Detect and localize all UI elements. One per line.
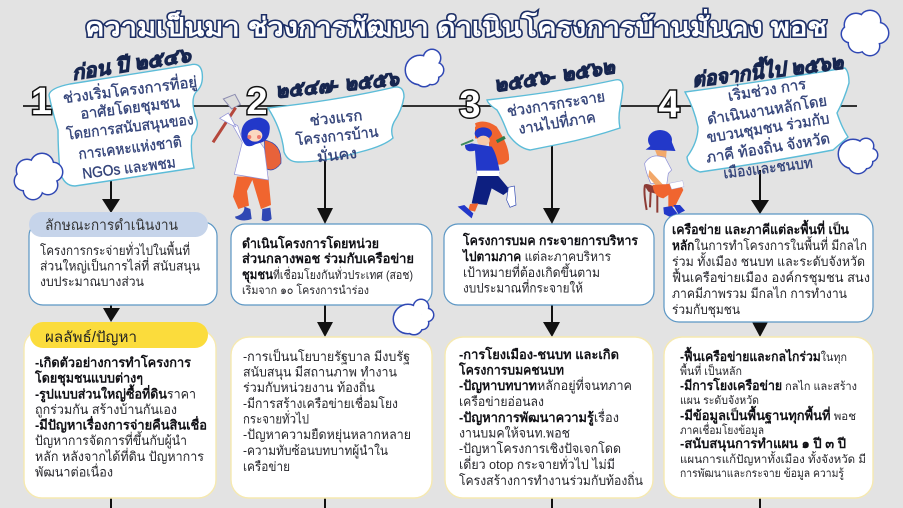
connector lines and arrows [102,144,769,508]
text: period 4 method: หลักในการทำโครงการในพื้นที่ มีกลไก [672,236,867,253]
banner: period 4: เมืองและชนบท [722,155,814,182]
banner: period 2: มั่นคง [316,142,358,166]
text: period 2 results: -ความทับซ้อนบทบาทผู้นำใน [243,443,388,459]
text: period 3 results [458,346,643,488]
text: period 4 results: แผน ระดับจังหวัด [680,395,759,407]
text: period 4 results: -ฟื้นเครือข่ายและกลไกร่วมในทุก [680,346,847,364]
banner: period 2: ช่วงแรก [309,107,363,130]
text: period 1 results: ปัญหาการจัดการที่ขึ้นกับผู้นำ [35,431,187,449]
text: period 3 results: -ปัญหาโครงการเชิงปัจเจกโดด [459,441,621,456]
number 1: 1 [31,81,52,123]
text: period 2 method: ส่วนกลางพอช ร่วมกับเครือข่าย [242,251,414,266]
text: period 2 method: เริ่มจาก ๑๐ โครงการนำร่อง [242,282,369,297]
text: period 2 method: ดำเนินโครงการโดยหน่วย [242,235,379,251]
text: period 2 method [242,235,414,297]
heading: working method [29,212,208,237]
banner: period 2: โครงการบ้าน [295,123,379,149]
text: period 1 results: โดยชุมชนแบบต่างๆ [34,370,143,386]
text: period 4 method: เครือข่าย และภาคีแต่ละพื้นที่ เป็น [672,219,849,237]
banner: period 2 [268,87,404,166]
text: period 1 results: พัฒนาต่อเนื่อง [35,464,113,480]
text: period 1 results [34,354,207,480]
text: period 1 method: ส่วนใหญ่เป็นการไล่ที่ สนับสนุน [40,256,200,274]
text: period 2 results: กระจายทั่วไป [243,410,309,426]
text: period 4 method: ร่วมกับชุมชน [672,302,740,318]
banner: period 1: โดยการสนับสนุนของ [65,110,195,145]
heading: results and problems [30,322,208,348]
text: period 1 results: -เกิดตัวอย่างการทำโครงการ [35,354,191,370]
banner: period 4: ภาคี ท้องถิ่น จังหวัด [705,127,831,167]
text: period 4 results: พื้นที่ เป็นหลัก [680,363,742,378]
text: period 3 results: เครือข่ายอ่อนลง [459,394,544,409]
panel: period 2 method [231,224,432,305]
heading: from 2562 onward: ต่อจากนี้ไป ๒๕๖๒ [690,47,845,92]
text: period 3 results: -การโยงเมือง-ชนบท และเกิด [459,346,619,362]
panel: period 3 method [444,224,654,305]
text: period 4 method: ฟื้นเครือข่ายเมือง องค์กรชุมชน สนง [672,268,870,286]
banner: period 4: ขบวนชุมชน ร่วมกับ [706,110,831,148]
text: period 4 results: -มีข้อมูลเป็นพื้นฐานทุกพื้นที่ พอช [680,405,856,425]
text: period 3 results: โครงการบมคชนบท [458,362,564,378]
icon: cloud left [15,154,62,199]
number 2: 2 [246,81,268,123]
banner: period 3: ช่วงการกระจาย [506,88,606,121]
title: ความเป็นมา ช่วงการพัฒนา ดำเนินโครงการบ้านมั่นคง พอช [85,8,827,42]
text: period 1 results: หลัก หลังจากได้ที่ดิน ปัญหาการ [35,448,204,464]
text: period 3 method: โครงการบมค กระจายการบริหาร [462,232,638,248]
text: period 1 results: -รูปแบบส่วนใหญ่ซื้อที่ดินราคา [35,384,196,402]
text: period 4 results: -มีการโยงเครือข่าย กลไก และสร้าง [680,377,857,393]
text: period 3 results: งานบมคให้จนท.พอช [459,426,570,440]
text: period 4 method: ร่วม ทั้งเมือง ชนบท และระดับจังหวัด [672,252,865,269]
text: period 2 results [243,347,411,474]
icon: cloud lower centre [394,300,433,334]
banner: period 3 [487,80,623,150]
banner: period 4: เริ่มช่วง การ [726,73,807,105]
text: period 3 results: โครงสร้างการทำงานร่วมกับท้องถิ่น [459,472,643,488]
text: period 3 results: -ปัญหาบทบาทหลักอยู่ที่จนทภาค [459,377,632,394]
heading: 2556-2562: ๒๕๕๖- ๒๕๖๒ [492,56,617,97]
banner: period 1: NGOs และพชม [81,154,177,183]
banner: period 1: ช่วงเริ่มโครงการที่อยู่ [62,71,198,107]
banner: period 3: งานไปที่ภาค [517,106,597,138]
text: period 2 results: -ปัญหาความยืดหยุ่นหลากหลาย [243,427,411,443]
text: period 2 results: ร่วมกับหน่วยงาน ท้องถิ่น [243,379,375,395]
text: period 2 method: ชุมชนที่เชื่อมโยงกันทั่วประเทศ (สอช) [242,266,413,283]
text: period 2 results: -การเป็นนโยบายรัฐบาล มีงบรัฐ [243,347,410,365]
text: period 1 method: โครงการกระจ่ายทั่วไปในพื้นที่ [40,241,190,258]
text: period 1 results: ถูกร่วมกัน สร้างบ้านกันเอง [35,402,177,418]
text: period 2 results: เครือข่าย [243,459,290,474]
banner: period 1: การเคหะแห่งชาติ [77,134,183,163]
number 4: 4 [658,84,680,126]
text: period 3 results: -ปัญหาการพัฒนาความรู้เรื่อง [459,409,619,426]
heading: results and problems: ผลลัพธ์/ปัญหา [45,329,137,346]
banner: period 4: ดำเนินงานหลักโดย [706,92,828,128]
figure: hiker with shovel [213,94,281,221]
panel: period 4 method [664,214,873,322]
banner: period 1: อาศัยโดยชุมชน [79,93,181,124]
text: period 3 method: เป้าหมายที่ต้องเกิดขึ้นตาม [463,263,600,280]
panel: period 3 results [445,337,653,498]
text: period 3 method: งบประมาณที่กระจายให้ [463,280,583,296]
text: period 2 results: -มีการสร้างเครือข่ายเชื่อมโยง [243,395,398,411]
text: period 4 results: การพัฒนาและกระจาย ข้อมูล ความรู้ [680,467,844,480]
figure: running hiker [458,121,516,218]
text: period 4 results [680,346,866,480]
banner: period 1 [49,64,202,186]
figure: seated reader [644,130,685,217]
heading: before 2546: ก่อน ปี ๒๕๔๖ [70,43,194,85]
text: period 4 method: ภาคมีภาพรวม มีกลไก การทำงาน [672,286,847,301]
number 3: 3 [459,84,481,126]
text: period 1 results: -มีปัญหาเรื่องการจ่ายคืนสินเชื่อ [35,416,207,434]
text: period 4 method [672,219,870,318]
panel: period 1 results [24,322,216,498]
icon: cloud top right [842,11,888,55]
text: period 3 results: เดี่ยว otop กระจายทั่วไป ไม่มี [459,456,615,472]
panel: period 4 results [664,337,873,498]
text: period 1 method: งบประมาณบางส่วน [40,274,144,289]
text: period 4 results: แผนการแก้ปัญหาทั้งเมือง ทั้งจังหวัด มี [680,451,866,466]
icon: cloud right [839,139,877,173]
text: period 1 method [40,241,200,289]
icon: cloud upper centre [406,50,443,86]
text: period 2 results: สนับสนุน มีสถานภาพ ทำงาน [243,364,397,380]
text: period 4 results: -สนับสนุนการทำแผน ๑ ปี ๓ ปี [680,436,846,452]
panel: period 2 results [231,337,432,498]
heading: 2547-2556: ๒๕๔๗- ๒๕๕๖ [274,68,401,103]
text: period 3 method [461,232,638,296]
heading: working method: ลักษณะการดำเนินงาน [45,218,178,234]
text: period 3 method: ไปตามภาค แต่ละภาคบริหาร [461,248,611,264]
banner: period 4 [685,68,849,182]
panel: period 1 method [29,212,217,305]
text: period 4 results: ภาคเชื่อมโยงข้อมูล [680,422,764,437]
